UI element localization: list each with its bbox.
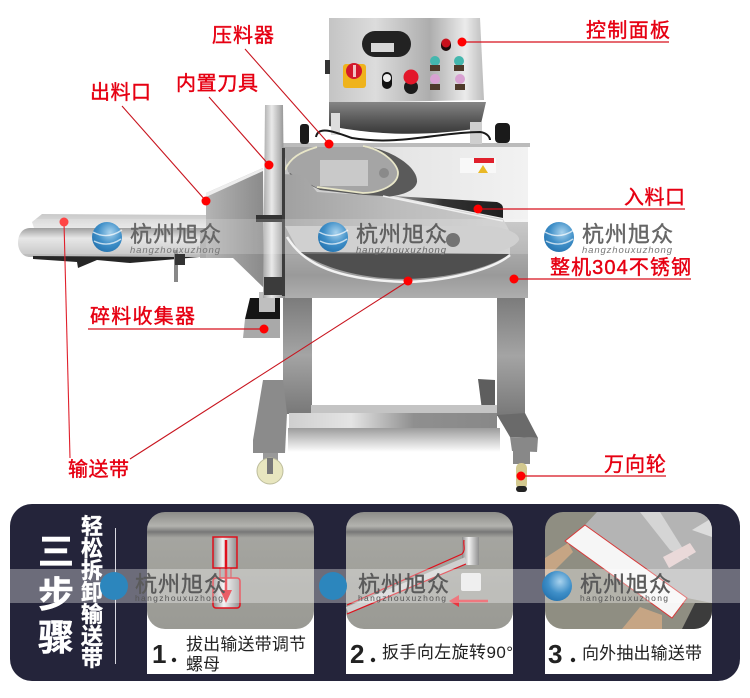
subheading: 轻松拆卸输送带: 拆 (81, 558, 103, 583)
right leg (497, 296, 525, 416)
indicator lamp (441, 38, 451, 51)
watermark 5 (319, 572, 449, 603)
top watermark band (0, 219, 750, 256)
step 2 card (346, 512, 513, 674)
watermark 2 (318, 222, 447, 256)
subheading: 轻松拆卸输送带: 输 (81, 602, 103, 627)
watermark 4 (100, 572, 226, 603)
heading: 三步骤: 三 (38, 531, 74, 572)
watermark 4: 杭州旭众 (135, 572, 226, 597)
watermark 3 (544, 222, 673, 256)
infeed opening (393, 196, 503, 218)
callout: 入料口: 入料口 (624, 186, 685, 209)
left leg (283, 296, 312, 414)
callout: 万向轮 (516, 453, 666, 480)
conveyor belt (18, 214, 262, 282)
step 1 card (147, 512, 314, 674)
step 2 number: 2 (350, 639, 364, 669)
watermark 2: hangzhouxuzhong (356, 245, 447, 256)
watermark 1: hangzhouxuzhong (130, 245, 221, 256)
callout: 压料器: 压料器 (212, 24, 274, 47)
watermark 1 (92, 222, 221, 256)
subheading: 轻松拆卸输送带: 送 (81, 624, 103, 649)
guide plate (285, 226, 519, 254)
machine body (282, 143, 530, 298)
watermark 4: hangzhouxuzhong (135, 593, 223, 603)
heading: 三步骤 (38, 531, 74, 658)
rear handles (300, 123, 510, 144)
callout: 碎料收集器: 碎料收集器 (90, 305, 195, 328)
step 2 photo (346, 512, 513, 629)
step 3 photo (545, 512, 712, 629)
panel: three-step removal (10, 504, 740, 681)
callout: 内置刀具 (176, 72, 274, 170)
display window (362, 31, 411, 57)
blade housing (256, 105, 285, 298)
subheading: 轻松拆卸输送带 (81, 514, 103, 671)
rear foot (478, 379, 495, 410)
emergency stop (404, 70, 418, 94)
bottom watermark band (10, 569, 740, 603)
subheading: 轻松拆卸输送带: 卸 (81, 580, 103, 605)
selector knob (382, 72, 392, 89)
heading: 三步骤: 步 (38, 574, 74, 615)
watermark 3: 杭州旭众 (582, 222, 673, 247)
side knob (325, 60, 330, 74)
step 3 text: 向外抽出输送带 (582, 644, 702, 663)
step 1 photo (147, 512, 314, 629)
watermark 1: 杭州旭众 (130, 222, 221, 247)
left caster (257, 453, 283, 484)
subheading: 轻松拆卸输送带: 轻 (81, 514, 103, 539)
pink buttons (430, 74, 465, 90)
callout: 碎料收集器 (88, 305, 268, 334)
watermark 6: 杭州旭众 (580, 572, 671, 597)
step 3 card (545, 512, 712, 674)
subheading: 轻松拆卸输送带: 松 (81, 536, 103, 561)
watermark 6 (542, 571, 671, 603)
right foot (497, 413, 538, 452)
discharge chute (206, 168, 264, 288)
left foot (253, 380, 287, 453)
right caster (513, 451, 530, 492)
machine illustration (18, 18, 538, 492)
panel background (10, 504, 740, 681)
watermark 2: 杭州旭众 (356, 222, 447, 247)
callout: 整机304不锈钢 (510, 256, 691, 284)
control box (300, 18, 510, 144)
callout labels (60, 19, 691, 481)
scrap collector (243, 292, 280, 338)
callout: 出料口: 出料口 (90, 81, 151, 104)
warning sticker (460, 158, 496, 173)
callout: 控制面板 (458, 19, 670, 46)
presser window (283, 146, 417, 197)
callout: 出料口 (90, 81, 210, 206)
subheading: 轻松拆卸输送带: 带 (81, 646, 103, 671)
cross bar (289, 405, 497, 428)
step 1 number: 1 (152, 639, 166, 669)
watermark 5: 杭州旭众 (358, 572, 449, 597)
watermark 5: hangzhouxuzhong (358, 593, 446, 603)
callout: 万向轮: 万向轮 (604, 453, 666, 476)
callout: 输送带 (60, 218, 412, 481)
callout: 整机304不锈钢: 整机304不锈钢 (550, 256, 691, 279)
ground shadow (288, 428, 500, 452)
main switch (343, 63, 366, 88)
step 2 text: 扳手向左旋转90° (382, 643, 513, 662)
lower curved belt (300, 252, 510, 279)
step 1 card: 螺母 (186, 655, 220, 674)
heading: 三步骤: 骤 (38, 617, 74, 658)
callout: 控制面板: 控制面板 (586, 19, 670, 42)
cables (316, 130, 490, 140)
callout: 压料器 (212, 24, 334, 148)
callout: 内置刀具: 内置刀具 (176, 72, 258, 95)
slanted plate (282, 174, 510, 255)
green buttons (430, 56, 464, 71)
step 1 text: 拔出输送带调节 (186, 635, 306, 654)
step 3 number: 3 (548, 639, 562, 669)
callout: 入料口 (474, 186, 685, 214)
watermark 3: hangzhouxuzhong (582, 245, 673, 256)
watermark 6: hangzhouxuzhong (580, 593, 668, 603)
callout: 输送带: 输送带 (68, 458, 129, 481)
